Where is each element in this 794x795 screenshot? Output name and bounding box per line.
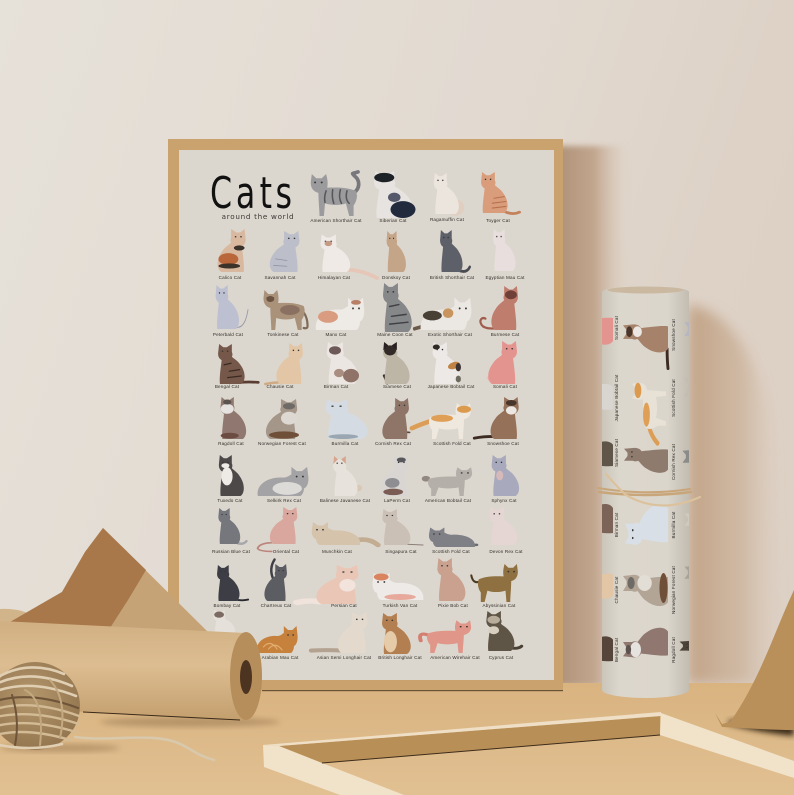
cat: Chartreux: Chartreux Cat <box>261 603 292 608</box>
cat: Chausie: Chausie Cat <box>266 384 294 389</box>
cat: Birman <box>324 342 359 389</box>
rolled cats <box>602 318 689 662</box>
cat: Snowshoe: Snowshoe Cat <box>487 441 519 446</box>
cat: Russian Blue <box>212 508 251 554</box>
cat: Norwegian Forest <box>258 399 306 446</box>
cat: Asian Semi Longhair <box>311 612 372 660</box>
cat: Munchkin: Munchkin Cat <box>322 549 353 554</box>
cat: Cyprus <box>486 611 522 660</box>
rolled edge cats right <box>680 322 689 651</box>
rolled labels: Chausie Cat <box>614 576 619 604</box>
upright poster roll <box>597 286 701 698</box>
cat: Persian: Persian Cat <box>331 603 357 608</box>
crumpled kraft paper <box>0 528 208 632</box>
cat: Turkish Van: Turkish Van Cat <box>383 603 418 608</box>
cat: Burmese: Burmese Cat <box>491 332 520 337</box>
cat: Arabian Mau <box>256 626 299 660</box>
cat: Maine Coon <box>377 283 413 337</box>
cat: Maine Coon: Maine Coon Cat <box>377 332 413 337</box>
cat: Donskoy <box>382 231 411 280</box>
cat: Siberian: Siberian Cat <box>379 218 407 223</box>
cat: Singapura <box>382 509 423 554</box>
cat: Tonkinese <box>263 290 308 337</box>
cat: American Shorthair <box>310 172 362 223</box>
twine tie <box>598 474 700 506</box>
cat: Calico: Calico Cat <box>219 275 242 280</box>
subtitle: around the world <box>222 212 294 221</box>
roll core <box>240 660 252 694</box>
cat: British Longhair <box>378 613 422 660</box>
cat: Bombay <box>214 565 248 608</box>
rolled edge cats left <box>602 318 613 662</box>
cat: Cornish Rex <box>375 398 412 446</box>
rolled labels: Siamese Cat <box>614 438 619 467</box>
rolled labels: Snowshoe Cat <box>671 319 676 351</box>
rolled cat: Burmilla <box>625 504 668 545</box>
cat: Japanese Bobtail <box>428 342 475 389</box>
cat: Devon Rex <box>489 507 523 554</box>
cat: Tonkinese: Tonkinese Cat <box>267 332 299 337</box>
rolled labels: Scottish Fold Cat <box>671 379 676 417</box>
cat: LaPerm: LaPerm Cat <box>384 498 411 503</box>
cat: Abyssinian <box>471 564 518 608</box>
cats row 5 <box>218 397 519 446</box>
cat: Sphynx <box>491 455 519 503</box>
roll end <box>230 632 262 720</box>
rolled labels: Norwegian Forest Cat <box>671 566 676 614</box>
cat: Scottish Fold grey <box>429 528 477 554</box>
rolled cat: Ragdoll <box>623 628 668 657</box>
rolled labels: Ragdoll Cat <box>671 637 676 663</box>
cat: British Shorthair: British Shorthair Cat <box>430 275 475 280</box>
kraft paper on the right <box>715 590 794 736</box>
cat: Ragamuffin: Ragamuffin Cat <box>430 217 465 222</box>
cat: Scottish Fold striped <box>412 403 471 446</box>
shadow behind the upright roll <box>688 305 780 684</box>
cat: Birman: Birman Cat <box>324 384 349 389</box>
cat: Cyprus: Cyprus Cat <box>489 655 514 660</box>
cat: Norwegian Forest: Norwegian Forest Cat <box>258 441 306 446</box>
cat: American Bobtail: American Bobtail Cat <box>425 498 472 503</box>
cat: Selkirk Rex: Selkirk Rex Cat <box>267 498 302 503</box>
cat: Manx <box>316 298 364 337</box>
rolled labels: Cornish Rex Cat <box>671 443 676 480</box>
rolled labels: Somali Cat <box>614 315 619 340</box>
cat: Ragdoll <box>218 397 246 446</box>
cat: Balinese Javanese <box>320 456 371 503</box>
rolled labels: Japanese Bobtail Cat <box>614 374 619 421</box>
cat: Siamese <box>383 342 412 389</box>
cat: Exotic Shorthair: Exotic Shorthair Cat <box>428 332 473 337</box>
rolled labels: Burmilla Cat <box>671 511 676 538</box>
cat: Savannah: Savannah Cat <box>264 275 296 280</box>
cat: Bombay: Bombay Cat <box>214 603 241 608</box>
cat: Donskoy: Donskoy Cat <box>382 275 411 280</box>
rolled cat: Scottish Fold <box>632 383 666 443</box>
cat: Siamese: Siamese Cat <box>383 384 412 389</box>
cat: Sphynx: Sphynx Cat <box>491 498 517 503</box>
title: Cats <box>210 168 292 219</box>
cats row 6 <box>217 455 519 503</box>
cats row 1 <box>310 171 520 223</box>
cat: Oriental <box>258 507 300 554</box>
roll opening <box>608 286 684 294</box>
panel: framed poster <box>168 139 563 691</box>
rolled labels: Bengal Cat <box>614 637 619 662</box>
cat: American Wirehair <box>420 620 480 660</box>
cats row 7 <box>212 507 523 554</box>
cat: Egyptian Mau <box>485 229 525 280</box>
cat: Exotic Shorthair <box>414 298 473 337</box>
rolled cat: Cornish Rex <box>624 448 668 473</box>
cat: Peterbald: Peterbald Cat <box>213 332 244 337</box>
cat: Pixie Bob: Pixie Bob Cat <box>438 603 469 608</box>
rolled labels: Birman Cat <box>614 512 619 537</box>
cat: Peterbald <box>213 285 248 337</box>
cat: Himalayan <box>318 234 377 280</box>
cat: Bengal: Bengal Cat <box>215 384 240 389</box>
shadow behind the poster <box>555 146 627 686</box>
cats row 3 <box>213 283 520 337</box>
cat: Burmese <box>480 286 520 337</box>
cat: Arabian Mau: Arabian Mau Cat <box>262 655 299 660</box>
cat: Toyger: Toyger Cat <box>486 218 510 223</box>
cat: British Shorthair <box>430 230 475 280</box>
cat: Ragdoll: Ragdoll Cat <box>218 441 244 446</box>
cats row 4 <box>215 341 518 389</box>
cat: Abyssinian: Abyssinian Cat <box>483 603 516 608</box>
twine ball <box>0 662 214 760</box>
cat: Scottish Fold striped: Scottish Fold Cat <box>433 441 471 446</box>
cat: Singapura: Singapura Cat <box>385 549 417 554</box>
cat: Ragamuffin <box>430 173 465 222</box>
cat: American Bobtail <box>422 467 472 503</box>
cats row 2 <box>218 229 525 280</box>
cat: Himalayan: Himalayan Cat <box>318 275 351 280</box>
cat: American Shorthair: American Shorthair Cat <box>310 218 362 223</box>
cat: Devon Rex: Devon Rex Cat <box>489 549 523 554</box>
cat: Egyptian Mau: Egyptian Mau Cat <box>485 275 525 280</box>
cat: Burmilla <box>325 399 368 446</box>
roll shadow <box>100 717 280 727</box>
cat: Pixie Bob <box>437 558 469 608</box>
cat: Toyger <box>481 172 520 223</box>
cat: Tuxedo <box>217 455 244 503</box>
cat: Balinese Javanese: Balinese Javanese Cat <box>320 498 371 503</box>
cat: Bengal <box>215 344 258 389</box>
cat: Munchkin <box>312 522 378 554</box>
rolled cat: Snowshoe <box>623 324 668 369</box>
empty wooden frame on the table <box>263 712 794 795</box>
cat: Snowshoe <box>474 397 519 446</box>
cat: hidden Himalayan behind the roll <box>213 610 235 636</box>
cat: Cornish Rex: Cornish Rex Cat <box>375 441 412 446</box>
rolled cat: Norwegian Forest <box>623 573 668 606</box>
cat: LaPerm <box>381 455 411 503</box>
cat: Siberian <box>374 171 416 223</box>
cat: Persian <box>298 565 359 608</box>
cat: British Longhair: British Longhair Cat <box>378 655 422 660</box>
poster frame bottom shadow line <box>262 690 563 691</box>
cats row 8 <box>214 558 518 608</box>
cat: Selkirk Rex <box>258 467 308 503</box>
cat: Scottish Fold grey: Scottish Fold Cat <box>432 549 470 554</box>
twine string <box>75 737 214 760</box>
cat: American Wirehair: American Wirehair Cat <box>430 655 480 660</box>
cat: Somali <box>487 341 518 389</box>
cat: Asian Semi Longhair: Asian Semi Longhair Cat <box>317 655 372 660</box>
cat: Manx: Manx Cat <box>326 332 347 337</box>
poster sheet <box>179 150 554 680</box>
poster frame <box>168 139 563 690</box>
cat: Japanese Bobtail: Japanese Bobtail Cat <box>428 384 475 389</box>
cat: Chartreux <box>261 560 292 608</box>
cat: Burmilla: Burmilla Cat <box>332 441 359 446</box>
cat: Calico <box>218 229 246 280</box>
cat: Russian Blue: Russian Blue Cat <box>212 549 251 554</box>
kraft paper roll <box>0 621 280 727</box>
tabletop <box>0 683 794 795</box>
roll body <box>602 286 689 698</box>
cats row 9 <box>213 610 522 660</box>
rolled labels <box>614 315 676 663</box>
cat: Chausie <box>265 343 303 389</box>
cat: Somali: Somali Cat <box>493 384 518 389</box>
cat: Oriental: Oriental Cat <box>273 549 300 554</box>
cat: Savannah <box>264 231 299 280</box>
cat: Turkish Van <box>373 573 423 608</box>
cat: Tuxedo: Tuxedo Cat <box>217 498 243 503</box>
